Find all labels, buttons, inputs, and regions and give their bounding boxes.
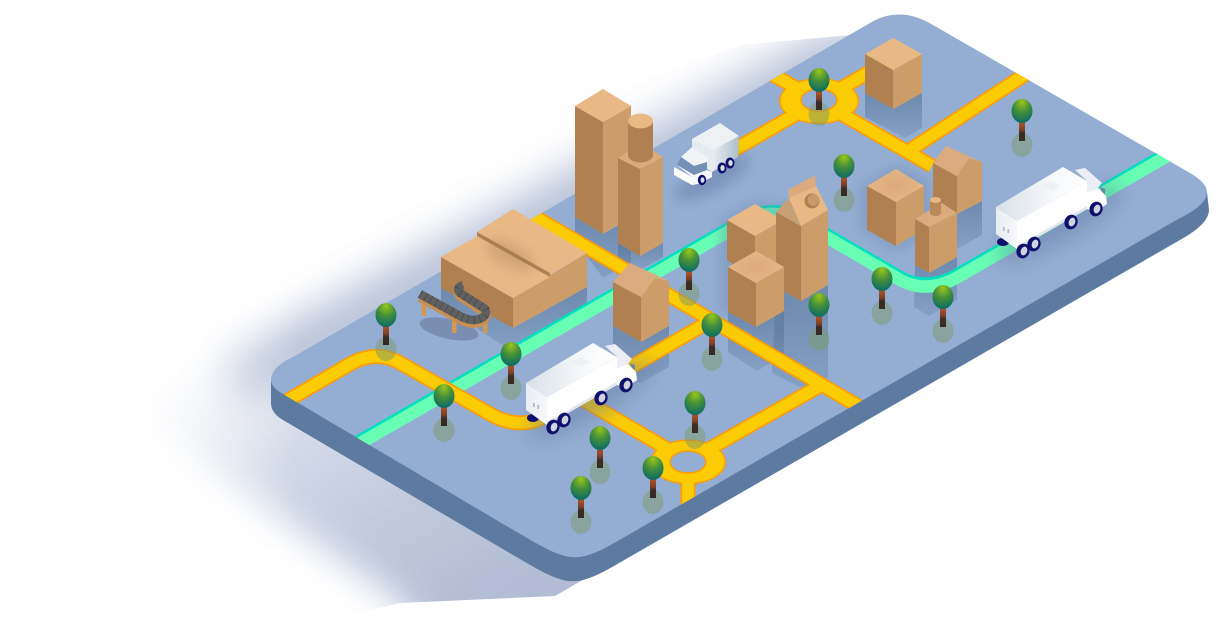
right cube (867, 169, 924, 246)
small building with chimney (915, 197, 957, 273)
conveyor belt (418, 285, 488, 345)
platform top surface (271, 14, 1207, 557)
tree (932, 285, 954, 343)
yellow road network (273, 60, 1035, 525)
building: tall tower (575, 89, 631, 234)
platform drop shadow (184, 35, 849, 609)
soft ambient shadows around buildings (720, 165, 932, 330)
tree (808, 293, 830, 351)
tree (702, 313, 722, 371)
tree (678, 248, 700, 306)
front cube (728, 251, 784, 327)
milk carton building (776, 175, 828, 301)
house by the roads (613, 263, 669, 342)
tree (434, 384, 454, 442)
house at right (933, 146, 982, 214)
green delivery route (354, 152, 1170, 445)
tree (642, 456, 664, 514)
tree (808, 68, 830, 126)
building: tower with cylinder (618, 114, 663, 256)
tree (684, 391, 706, 449)
small delivery truck (668, 123, 756, 210)
back cube (727, 204, 783, 280)
building: top right cube (865, 38, 922, 109)
building reflections (441, 93, 982, 387)
tree (872, 267, 892, 325)
tree (500, 342, 522, 400)
tree (570, 476, 592, 534)
tree (376, 303, 396, 361)
tree (834, 154, 854, 212)
long white truck, front (519, 343, 661, 452)
tree (1012, 99, 1032, 157)
warehouse (441, 209, 587, 328)
tree (590, 426, 610, 484)
long white truck, right (989, 167, 1131, 276)
platform side wall (271, 192, 1209, 581)
